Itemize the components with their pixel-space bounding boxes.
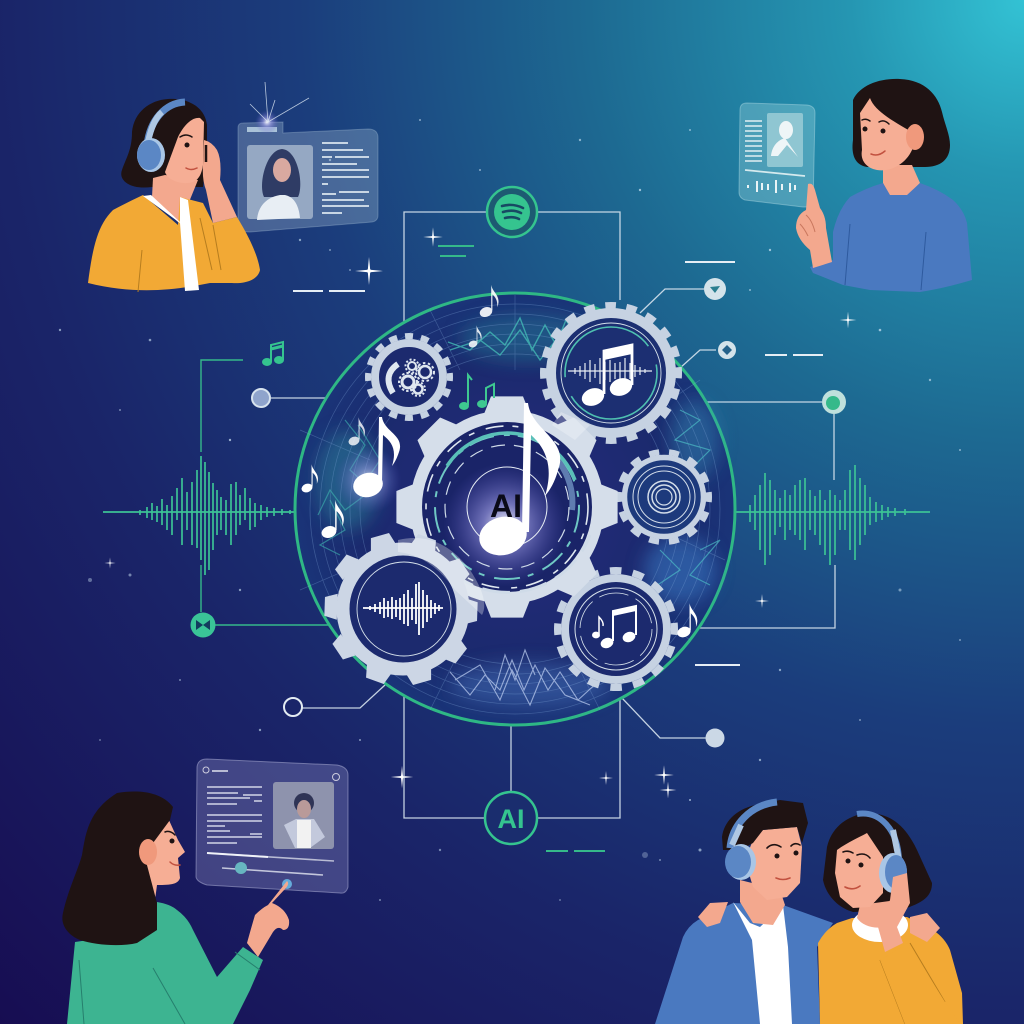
hand xyxy=(796,184,832,268)
cardigan xyxy=(88,195,260,290)
hair xyxy=(853,79,950,167)
green connector lines xyxy=(201,360,330,625)
gear: top left small xyxy=(368,336,450,418)
waveform xyxy=(363,582,443,635)
portrait xyxy=(257,149,300,220)
woman neck xyxy=(857,900,900,928)
person: top left listener xyxy=(88,99,260,292)
face xyxy=(860,98,917,170)
face details xyxy=(165,831,180,865)
icon: AI badge: AI xyxy=(498,804,524,834)
wave with notes xyxy=(568,358,652,384)
woman collar xyxy=(852,908,908,942)
person: top right xyxy=(796,79,972,292)
connector lines xyxy=(271,212,835,818)
node circles xyxy=(252,278,846,748)
text lines xyxy=(322,143,369,213)
neck xyxy=(883,165,920,196)
data wave bottom xyxy=(450,650,600,705)
face xyxy=(165,118,204,183)
big music note xyxy=(475,403,560,561)
glass card: bottom left player xyxy=(196,759,348,893)
hand xyxy=(203,140,237,223)
collar xyxy=(143,195,199,291)
concentric ripple lines xyxy=(300,295,725,714)
gear: right medium xyxy=(619,452,709,542)
sweater xyxy=(810,183,972,292)
sparkles xyxy=(104,227,856,798)
neck xyxy=(152,175,198,224)
waveform right xyxy=(735,465,930,565)
label: AI: AI xyxy=(490,488,522,524)
icon: green music note xyxy=(263,342,283,365)
man face xyxy=(745,827,802,900)
gear: bottom right music xyxy=(558,570,674,688)
gear: central xyxy=(396,396,618,618)
hand xyxy=(247,881,289,957)
icon: play skip node xyxy=(190,612,216,638)
man neck xyxy=(740,880,785,925)
sparkle xyxy=(250,82,309,134)
floating white notes xyxy=(300,285,697,639)
man xyxy=(655,800,833,1024)
short dashes xyxy=(293,246,823,851)
woman xyxy=(818,813,963,1024)
mini gears icon xyxy=(389,360,434,396)
man jacket xyxy=(655,903,833,1024)
man hair xyxy=(722,800,808,850)
light clouds xyxy=(316,314,719,707)
hand on shoulder right xyxy=(910,913,940,942)
person: bottom left xyxy=(62,791,289,1024)
note: glow xyxy=(334,446,402,514)
hair xyxy=(62,791,173,945)
face details xyxy=(862,119,889,155)
target rings xyxy=(633,466,695,528)
notes xyxy=(599,636,615,650)
woman hair xyxy=(823,813,932,912)
woman sweater xyxy=(818,917,963,1024)
woman sleeve xyxy=(880,943,960,1024)
person: couple with headphones xyxy=(655,800,963,1024)
gear overlap highlight xyxy=(552,412,590,440)
waveform left xyxy=(103,456,300,575)
man shirt xyxy=(733,902,792,1024)
glass card: top right player xyxy=(739,103,815,207)
dashed rings xyxy=(426,426,590,592)
sweater xyxy=(67,902,263,1024)
icon: spotify badge xyxy=(487,187,537,237)
data swirls right xyxy=(650,410,720,590)
starfield xyxy=(59,119,961,901)
woman features xyxy=(843,851,870,889)
icon: AI badge xyxy=(485,792,537,844)
woman face xyxy=(835,833,883,908)
glass card: top left profile xyxy=(238,82,378,232)
overlap highlight xyxy=(398,538,484,615)
data wave top xyxy=(448,310,600,360)
sphere xyxy=(295,293,735,725)
man features xyxy=(767,844,800,880)
hand on shoulder left xyxy=(698,902,728,927)
man headphones xyxy=(725,802,777,880)
woman headphones xyxy=(857,813,907,893)
green notes xyxy=(460,375,494,409)
data swirls left xyxy=(318,420,380,555)
portrait xyxy=(284,793,325,848)
portrait xyxy=(771,121,798,157)
hair xyxy=(121,99,207,188)
gear: top right music xyxy=(544,306,678,440)
center glow xyxy=(443,463,567,587)
note: large left xyxy=(350,417,400,500)
trapezoid teeth xyxy=(324,532,478,686)
face details xyxy=(180,135,197,170)
face xyxy=(143,818,185,900)
trapezoid teeth xyxy=(396,396,618,618)
headphones xyxy=(137,102,185,172)
gear: bottom left waveform xyxy=(324,532,484,686)
cardigan creases xyxy=(138,218,221,292)
woman hand xyxy=(878,873,910,952)
